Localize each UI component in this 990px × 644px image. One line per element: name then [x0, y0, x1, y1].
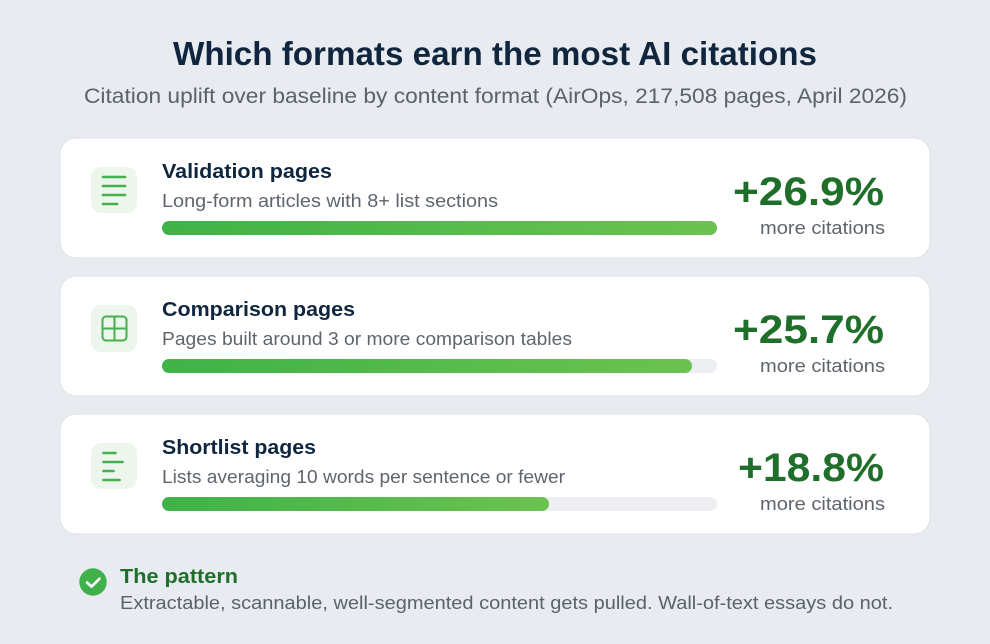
stat: +18.8%: +18.8%: [738, 446, 884, 490]
description: comparison pages: Pages built around 3 or more comparison tables: [162, 329, 572, 349]
icon: long list: [91, 167, 137, 213]
description: validation pages: Long-form articles with 8+ list sections: [162, 191, 498, 211]
subtitle: Citation uplift over baseline by content format (AirOps, 217,508 pages, April 2026): [84, 85, 907, 108]
stat label: more citations: [760, 218, 885, 238]
heading: shortlist pages: Shortlist pages: [162, 437, 316, 459]
icon: short list: [91, 443, 137, 489]
callout: the pattern: [79, 566, 893, 613]
description: shortlist pages: Lists averaging 10 words per sentence or fewer: [162, 467, 565, 487]
title: Which formats earn the most AI citations: [173, 35, 817, 72]
heading: comparison pages: Comparison pages: [162, 299, 355, 321]
stat: +25.7%: +25.7%: [733, 308, 884, 352]
icon: table grid: [91, 305, 137, 352]
bar: 18.8%: [162, 497, 717, 511]
stat label: more citations: [760, 494, 885, 514]
stat: +26.9%: +26.9%: [733, 170, 884, 214]
stat label: more citations: [760, 356, 885, 376]
bar: 25.7%: [162, 359, 717, 373]
heading: validation pages: Validation pages: [162, 161, 332, 183]
panel: comparison pages: [60, 276, 930, 396]
callout text: Extractable, scannable, well-segmented content gets pulled. Wall-of-text essays do not.: [120, 593, 893, 613]
icon: check mark: [79, 568, 107, 596]
callout heading: The pattern: [120, 566, 238, 588]
panel: shortlist pages: [60, 414, 930, 534]
bar: 26.9%: [162, 221, 717, 235]
panel: validation pages: [60, 138, 930, 258]
